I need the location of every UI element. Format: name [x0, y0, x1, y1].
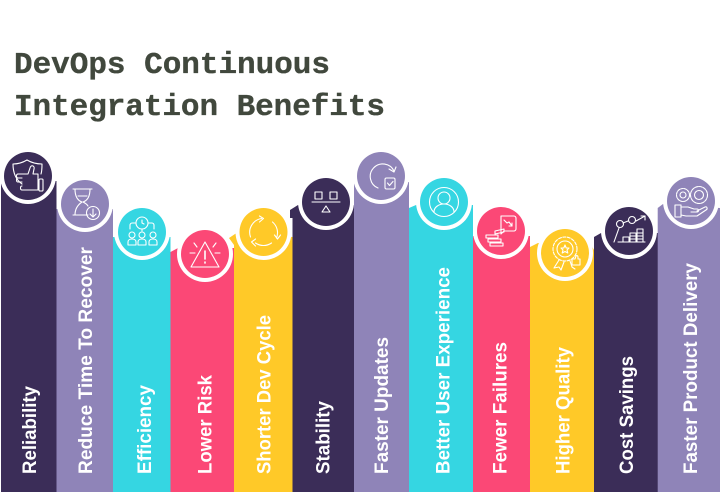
icon: warning triangle: [190, 242, 220, 267]
icon: balance scale: [312, 192, 340, 212]
panel: Better User Experience: Better User Experience: [434, 267, 454, 474]
panel: Faster Product Delivery: [658, 173, 720, 492]
panel: Faster Updates: [353, 148, 409, 492]
icon: refresh with checkbox: [370, 164, 396, 189]
panel: Reduce Time To Recover: Reduce Time To Recover: [76, 246, 97, 474]
panel: Fewer Failures: [473, 203, 530, 492]
icon: falling blocks and chart bubble: [486, 216, 516, 246]
title: DevOps Continuous: [14, 48, 330, 83]
panel: Reliability: Reliability: [20, 386, 41, 474]
panel: Faster Updates: Faster Updates: [372, 337, 393, 474]
panel: Higher Quality: Higher Quality: [554, 347, 574, 474]
icon: team around clock: [128, 217, 157, 245]
icon: hourglass with down arrow: [73, 189, 100, 220]
panel: Efficiency: Efficiency: [135, 385, 156, 474]
panel: Lower Risk: Lower Risk: [196, 375, 216, 474]
icon: cycle arrows: [250, 216, 280, 246]
icon: gears over hand: [675, 186, 708, 217]
panel: Stability: [290, 174, 354, 492]
panel: Reduce Time To Recover: [56, 176, 113, 492]
icon: user profile: [430, 188, 458, 216]
panel: Lower Risk: [170, 226, 234, 492]
panel: Reliability: [0, 148, 56, 492]
icon: shield with thumbs up: [13, 160, 43, 191]
panel: Shorter Dev Cycle: Shorter Dev Cycle: [254, 315, 276, 474]
panel: Stability: Stability: [314, 401, 334, 474]
panel: Better User Experience: [409, 174, 473, 492]
panel: Efficiency: [113, 204, 170, 492]
title: Integration Benefits: [14, 90, 385, 125]
panel: Cost Savings: Cost Savings: [617, 356, 638, 474]
panel: Fewer Failures: Fewer Failures: [490, 342, 512, 474]
panel: Faster Product Delivery: Faster Product Delivery: [681, 263, 702, 474]
title: [14, 48, 385, 125]
icon: rising coins chart: [614, 216, 645, 242]
icon: award ribbon: [553, 237, 580, 270]
panel: Higher Quality: [530, 225, 594, 492]
panel: Cost Savings: [594, 203, 658, 492]
panel: Shorter Dev Cycle: [229, 204, 292, 492]
